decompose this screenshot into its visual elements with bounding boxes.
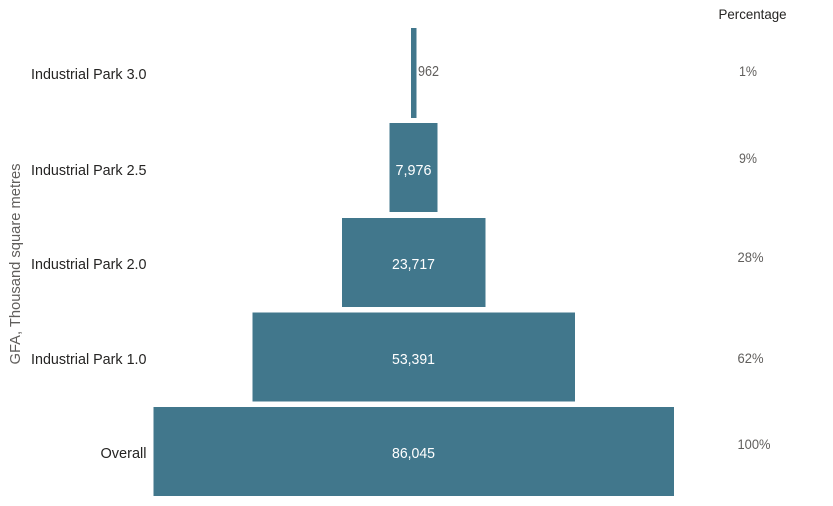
row: Industrial Park 1.0: Industrial Park 1.0 (31, 351, 146, 368)
row: Industrial Park 3.0: 1% (739, 63, 757, 79)
row: Overall: 100% (738, 436, 770, 452)
row: Overall: Overall (100, 445, 146, 462)
row: Industrial Park 2.0: Industrial Park 2.0 (31, 256, 146, 273)
row: Industrial Park 3.0: Industrial Park 3.0 (31, 66, 146, 83)
row: Overall (100, 407, 770, 496)
row: Industrial Park 1.0: 53,391 (392, 351, 435, 368)
row: Overall: 86,045 (392, 445, 435, 462)
row: Industrial Park 3.0 (31, 28, 757, 118)
row: Industrial Park 2.0: 28% (738, 249, 764, 265)
row: Industrial Park 1.0 (31, 312, 764, 402)
row: Industrial Park 3.0: 962 (418, 63, 439, 80)
row: Industrial Park 1.0: 62% (738, 350, 764, 366)
row: Industrial Park 2.5: 9% (739, 150, 757, 166)
row: Industrial Park 2.5: 7,976 (396, 162, 432, 179)
row: Industrial Park 2.5: Industrial Park 2.5 (31, 162, 146, 179)
row: Industrial Park 2.5 (31, 123, 757, 212)
axis title: GFA, Thousand square metres (7, 164, 24, 364)
row: Industrial Park 2.0 (31, 218, 764, 307)
column heading: percentage: Percentage (718, 6, 787, 22)
row: Industrial Park 2.0: 23,717 (392, 256, 435, 273)
